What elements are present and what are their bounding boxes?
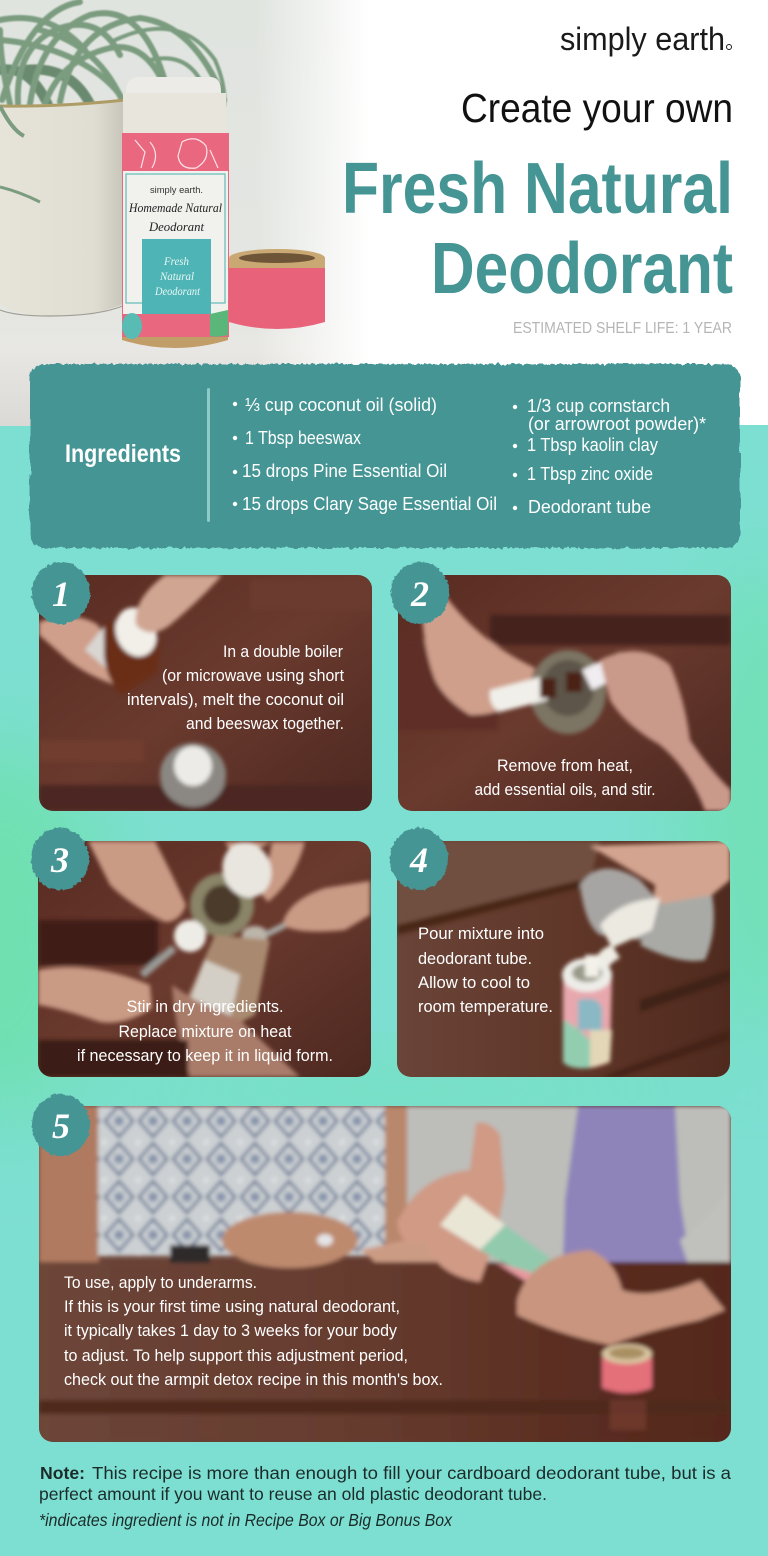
list: ingredients right column: 1 Tbsp kaolin clay xyxy=(527,435,658,455)
list: ingredients left column: 15 drops Pine Essential Oil xyxy=(242,461,447,481)
heading: ingredients: Ingredients xyxy=(65,440,181,468)
panel: step 1 xyxy=(32,562,372,811)
text: step 1: and beeswax together. xyxy=(186,715,344,733)
list: ingredients left column: 15 drops Clary Sage Essential Oil xyxy=(242,494,497,514)
text: step 2: Remove from heat, xyxy=(497,757,633,775)
number badge 4: 4 xyxy=(409,840,428,880)
label text on tube: Homemade Natural xyxy=(128,200,222,215)
list: ingredients right column xyxy=(513,396,706,517)
text: step 5 xyxy=(64,1274,443,1389)
label text on tube: Deodorant xyxy=(154,284,201,298)
text: step 1: (or microwave using short xyxy=(162,667,344,685)
note text: This recipe is more than enough to fill your cardboard deodorant tube, but is a xyxy=(92,1463,731,1483)
number badge 4 xyxy=(390,828,448,890)
number badge 2: 2 xyxy=(410,574,429,614)
text: step 3: Stir in dry ingredients. xyxy=(126,998,284,1016)
text: step 1: intervals), melt the coconut oil xyxy=(127,691,344,709)
number badge 5: 5 xyxy=(52,1106,70,1146)
text: step 5: To use, apply to underarms. xyxy=(64,1274,257,1292)
number badge 5 xyxy=(32,1094,90,1156)
text: step 1 xyxy=(127,643,344,733)
footnote: *indicates ingredient is not in Recipe Box or Big Bonus Box xyxy=(39,1510,453,1530)
title: create your own: Create your own xyxy=(461,85,733,131)
list: ingredients right column: (or arrowroot powder)* xyxy=(528,414,706,434)
text: step 4: deodorant tube. xyxy=(418,950,532,968)
text: step 5: check out the armpit detox recipe in this month's box. xyxy=(64,1371,443,1389)
list: ingredients right column: 1 Tbsp zinc oxide xyxy=(527,464,653,484)
hero photo: deodorant tube and plant xyxy=(0,0,340,426)
number badge 3 xyxy=(31,828,89,890)
list: ingredients left column xyxy=(233,395,497,514)
label text on tube xyxy=(128,185,222,298)
label text on tube: Deodorant xyxy=(148,219,204,234)
panel: ingredients xyxy=(30,364,740,548)
number badge 1 xyxy=(32,562,90,624)
note text: perfect amount if you want to reuse an old plastic deodorant tube. xyxy=(39,1484,547,1504)
text: step 2: add essential oils, and stir. xyxy=(474,781,656,799)
list: ingredients right column: 1/3 cup cornstarch xyxy=(527,396,670,416)
note text xyxy=(39,1463,731,1504)
label text on tube: simply earth. xyxy=(150,185,203,195)
text: step 5: If this is your first time using natural deodorant, xyxy=(64,1298,400,1316)
text: step 4: room temperature. xyxy=(418,998,553,1016)
text: step 2 xyxy=(474,757,656,799)
text: step 5: it typically takes 1 day to 3 weeks for your body xyxy=(64,1322,398,1340)
panel: step 5 xyxy=(32,1094,731,1442)
divider xyxy=(207,388,210,522)
title: fresh natural deodorant xyxy=(342,149,733,309)
number badge 1: 1 xyxy=(52,574,70,614)
text: step 4: Allow to cool to xyxy=(418,974,530,992)
logo: simply earth: simply earth xyxy=(560,21,725,57)
shelf life: ESTIMATED SHELF LIFE: 1 YEAR xyxy=(513,320,732,337)
text: step 3: Replace mixture on heat xyxy=(118,1023,292,1041)
list: ingredients left column: ⅓ cup coconut oil (solid) xyxy=(245,395,437,415)
icon: plant leaves xyxy=(0,2,224,110)
text: step 5: to adjust. To help support this adjustment period, xyxy=(64,1347,408,1365)
icon: plant pot xyxy=(0,100,125,316)
number badge 3: 3 xyxy=(50,840,69,880)
text: step 3: if necessary to keep it in liquid form. xyxy=(77,1047,333,1065)
list: ingredients right column: Deodorant tube xyxy=(528,497,651,517)
panel: step 4 xyxy=(390,828,730,1077)
icon: deodorant tube xyxy=(122,77,229,348)
note text: Note: xyxy=(40,1463,85,1483)
label text on tube: Fresh xyxy=(163,254,189,268)
label text on tube: Natural xyxy=(159,269,195,283)
number badge 2 xyxy=(391,562,449,624)
text: step 4 xyxy=(418,925,553,1016)
text: step 3 xyxy=(77,998,333,1065)
text: step 1: In a double boiler xyxy=(223,643,343,661)
icon: tube cap xyxy=(229,249,325,329)
panel: step 2 xyxy=(391,562,731,811)
list: ingredients left column: 1 Tbsp beeswax xyxy=(245,428,361,448)
panel: step 3 xyxy=(31,828,371,1077)
text: step 4: Pour mixture into xyxy=(418,925,544,943)
